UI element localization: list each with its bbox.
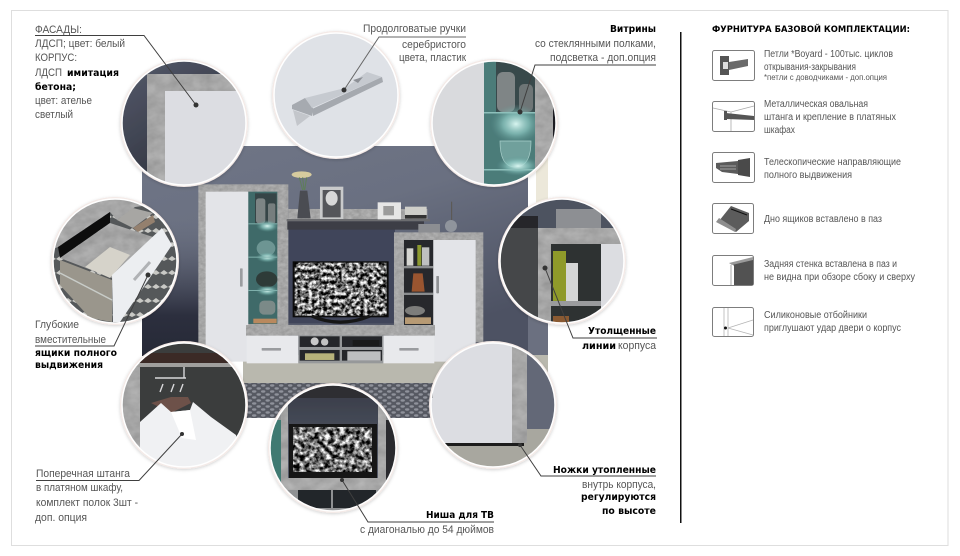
television xyxy=(293,261,389,322)
item: hinges: Петли *Boyard - 100тыс. циклов xyxy=(764,49,893,60)
item: telescopic runners: Телескопические направляющие xyxy=(764,157,901,168)
callout: drawers: вместительные xyxy=(35,334,106,346)
callout: handles xyxy=(342,23,466,92)
callout: legs: по высоте xyxy=(602,506,656,517)
circle: clothes rail detail xyxy=(120,340,250,472)
furniture wall unit xyxy=(198,171,483,363)
panel: base hardware xyxy=(712,23,915,336)
callout: facades: ЛДСП; цвет: белый xyxy=(35,38,125,50)
callout: legs xyxy=(518,443,656,517)
item: back panel xyxy=(712,256,915,286)
item: back panel: Задняя стенка вставлена в паз и xyxy=(764,259,897,270)
callout: facades: КОРПУС: xyxy=(35,52,77,64)
left cabinet xyxy=(198,184,288,362)
callout: thick lines xyxy=(542,266,657,352)
circle: drawer detail xyxy=(50,195,180,327)
room background xyxy=(142,146,548,418)
item: back panel: не видна при обзоре сбоку и сверху xyxy=(764,271,915,283)
callout: handles: Продолговатые ручки xyxy=(363,23,466,35)
callout: handles: цвета, пластик xyxy=(399,52,466,64)
item: hinges: открывания-закрывания xyxy=(764,62,856,73)
callout: drawers: ящики полного xyxy=(35,348,117,359)
callout: facades: цвет: ателье xyxy=(35,95,92,107)
item: hinges xyxy=(712,49,893,82)
callout: drawers: выдвижения xyxy=(35,360,103,371)
item: silicone bumpers: Силиконовые отбойники xyxy=(764,309,867,321)
item: telescopic runners xyxy=(712,152,901,182)
callout: glass cabinets xyxy=(518,24,656,114)
right cabinet xyxy=(394,232,483,362)
callout: handles: серебристого xyxy=(402,39,466,51)
item: telescopic runners: полного выдвижения xyxy=(764,170,852,181)
callout: facades: бетона; xyxy=(35,82,76,93)
item: rail: шкафах xyxy=(764,124,795,136)
callout: facades xyxy=(35,24,198,121)
callout: TV niche: Ниша для ТВ xyxy=(426,510,494,521)
callout: thick lines: Утолщенные xyxy=(588,326,656,337)
item: silicone bumpers: приглушают удар двери о корпус xyxy=(764,323,901,334)
callout: clothes rail: комплект полок 3шт - xyxy=(36,497,138,509)
callout: glass cabinets: Витрины xyxy=(610,24,656,35)
callout: glass cabinets: подсветка - доп.опция xyxy=(550,52,656,64)
circle: recessed legs detail xyxy=(428,340,558,470)
circle: handle detail xyxy=(270,30,405,165)
callout: facades: ЛДСП xyxy=(35,67,62,79)
TV stand xyxy=(246,325,435,363)
callout: TV niche: с диагональю до 54 дюймов xyxy=(360,524,494,536)
callout: clothes rail: в платяном шкафу, xyxy=(36,482,123,494)
callout: TV niche xyxy=(340,478,494,536)
callout: facades: светлый xyxy=(35,109,73,121)
callout: clothes rail xyxy=(35,432,184,524)
item: rail: штанга и крепление в платяных xyxy=(764,112,896,123)
item: drawer bottom: Дно ящиков вставлено в паз xyxy=(764,214,882,225)
item: hinges: *петли с доводчиками - доп.опция xyxy=(764,73,887,82)
circle: glass cabinet detail xyxy=(430,59,559,190)
circle: facade detail xyxy=(120,59,250,191)
callout: thick lines: линии xyxy=(582,341,616,352)
callout: legs: внутрь корпуса, xyxy=(582,479,656,491)
circle: thick body lines detail xyxy=(498,196,629,328)
upper shelf xyxy=(287,171,457,232)
item: rail xyxy=(712,99,896,136)
callout: drawers xyxy=(35,272,150,371)
callout: drawers: Глубокие xyxy=(35,319,79,331)
callout: facades: ФАСАДЫ: xyxy=(35,24,82,36)
callout: facades: имитация xyxy=(67,68,119,79)
vertical divider xyxy=(680,32,682,523)
circle: TV niche detail xyxy=(268,383,398,513)
callout: clothes rail: Поперечная штанга xyxy=(36,468,131,480)
item: drawer bottom xyxy=(712,204,882,234)
dark niche wall xyxy=(288,228,395,323)
callout: clothes rail: доп. опция xyxy=(35,512,87,524)
callout: thick lines: корпуса xyxy=(618,340,657,352)
item: silicone bumpers xyxy=(712,308,901,336)
callout: legs: регулируются xyxy=(581,492,656,503)
callout: glass cabinets: со стеклянными полками, xyxy=(535,38,656,50)
heading: ФУРНИТУРА БАЗОВОЙ КОМПЛЕКТАЦИИ: xyxy=(712,23,910,35)
callout: legs: Ножки утопленные xyxy=(553,465,656,476)
item: rail: Металлическая овальная xyxy=(764,99,868,110)
